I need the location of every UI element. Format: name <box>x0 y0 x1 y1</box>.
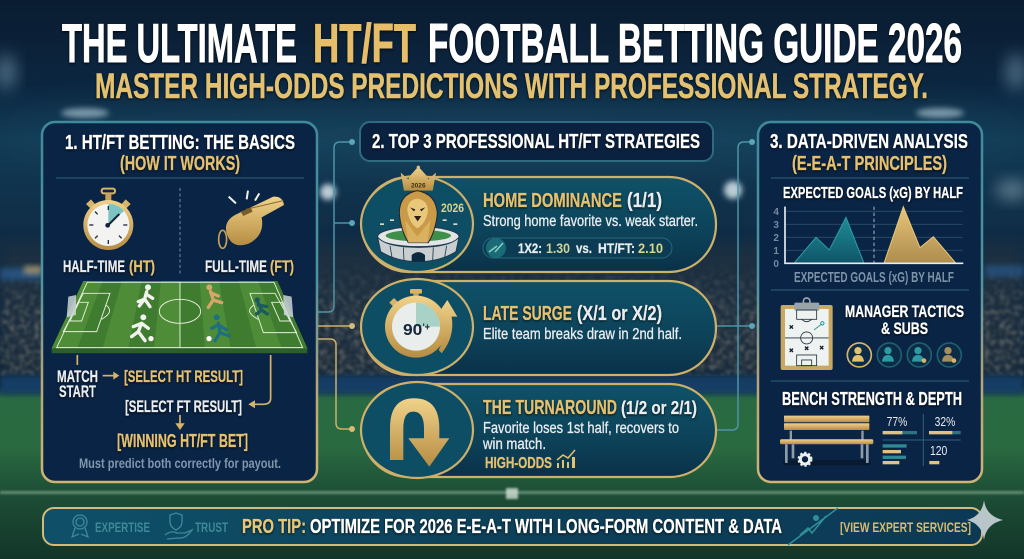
high-odds tag with chart icon: HIGH-ODDS <box>485 455 552 472</box>
title: HT/FT <box>313 12 416 74</box>
icon: whistle <box>219 191 284 248</box>
area chart: xG by half: 3 <box>773 220 779 231</box>
strategy description: Elite team breaks draw in 2nd half. <box>483 326 682 343</box>
panel 1 heading: (HOW IT WORKS) <box>120 153 240 175</box>
connectors: strategies to panel 3 <box>716 139 755 430</box>
chart accent <box>788 508 838 545</box>
icon: tactics clipboard <box>781 298 833 370</box>
strategy title: (1/1) <box>627 190 662 212</box>
label: manager tactics: MANAGER TACTICS <box>845 302 964 321</box>
players <box>132 284 267 341</box>
icon: U-turn arrow <box>361 382 473 478</box>
icon: expertise ribbon <box>72 515 88 537</box>
flow: select HT: [SELECT HT RESULT] <box>124 367 243 386</box>
label: 2026: 2026 <box>441 201 464 215</box>
area chart: xG by half <box>773 207 963 270</box>
area chart: xG by half: 4 <box>773 207 779 218</box>
flow: select FT: [SELECT FT RESULT] <box>125 397 242 416</box>
label: expertise: EXPERTISE <box>95 519 150 535</box>
icon: trust hand and shield <box>165 513 192 539</box>
card: the turnaround <box>361 382 716 478</box>
icon: 90+ stopwatch <box>361 279 473 375</box>
strategy title: (1/2 or 2/1) <box>621 398 697 418</box>
link: view expert services: [VIEW EXPERT SERVICES] <box>840 519 971 535</box>
football pitch with players <box>52 281 307 353</box>
icon: stopwatch <box>83 189 133 250</box>
odds pill: vs. <box>576 240 592 256</box>
icon: lion and stadium <box>361 166 473 272</box>
footnote: Must predict both correctly for payout. <box>79 455 281 471</box>
label: half-time: (HT) <box>129 257 155 276</box>
panel 1 heading <box>65 132 295 175</box>
area chart: xG by half: 1 <box>773 246 779 257</box>
panel 1: HT/FT basics <box>42 122 317 482</box>
strategy description: Favorite loses 1st half, recovers to <box>483 420 679 437</box>
flow: match start: START <box>59 382 96 401</box>
label: trust: TRUST <box>195 519 228 535</box>
strategy description: win match. <box>482 436 546 453</box>
strategy title: (X/1 or X/2) <box>577 303 662 325</box>
bench stats: 120 <box>930 444 947 458</box>
panel 2 heading <box>360 122 713 161</box>
flow arrows <box>77 355 271 430</box>
area chart: xG by half: 0 <box>773 259 779 270</box>
icon: lion and stadium: 2026 <box>411 183 426 189</box>
strategy description: Strong home favorite vs. weak starter. <box>483 213 698 230</box>
card: home dominance <box>361 166 716 272</box>
label: full-time: (FT) <box>270 257 294 276</box>
pro tip text: PRO TIP: <box>242 516 306 538</box>
label: full-time: FULL-TIME <box>205 257 267 276</box>
label: manager tactics: & SUBS <box>881 319 928 338</box>
icon: bench <box>780 416 873 466</box>
label: half-time: HALF-TIME <box>63 257 125 276</box>
strategy title: LATE SURGE <box>483 303 572 325</box>
strategy title: HOME DOMINANCE <box>483 190 622 212</box>
icons: manager and substitutes <box>847 343 961 367</box>
flow: match start <box>57 367 98 401</box>
bench stats: 32% <box>935 415 955 429</box>
panel 3 heading <box>770 131 968 175</box>
title: THE ULTIMATE <box>62 12 297 74</box>
pro tip bar <box>43 508 982 545</box>
pro tip text: OPTIMIZE FOR 2026 E-E-A-T WITH LONG-FORM CONTENT & DATA <box>310 516 782 538</box>
panel 2 heading: 2. TOP 3 PROFESSIONAL HT/FT STRATEGIES <box>372 131 700 153</box>
icon: sparkle <box>967 500 1003 540</box>
strategy title: THE TURNAROUND <box>483 397 617 419</box>
panel 1 heading: 1. HT/FT BETTING: THE BASICS <box>65 132 295 154</box>
icon: 90+ stopwatch: '+ <box>423 323 430 334</box>
odds pill: 2.10 <box>638 240 663 256</box>
panel 3 heading: (E-E-A-T PRINCIPLES) <box>792 153 947 175</box>
pro tip text <box>242 516 782 538</box>
odds pill <box>483 238 672 258</box>
connectors: panel 1 to strategies <box>317 139 355 432</box>
icon: 90+ stopwatch: 90 <box>403 322 422 339</box>
flow: match start: MATCH <box>57 367 98 386</box>
bench stats: 77% <box>887 415 907 429</box>
panel 3: data-driven analysis <box>758 122 982 482</box>
flow: winning bet: [WINNING HT/FT BET] <box>117 431 248 451</box>
card: late surge <box>361 279 716 375</box>
area chart: xG by half: 2 <box>773 233 779 244</box>
odds pill: 1X2: <box>518 240 542 256</box>
strategy description <box>482 420 679 453</box>
odds pill: HT/FT: <box>598 240 635 256</box>
label: manager tactics <box>845 302 964 338</box>
bench stats <box>883 414 961 466</box>
odds pill: 1.30 <box>546 240 570 256</box>
title <box>62 12 962 74</box>
panel 3 heading: 3. DATA-DRIVEN ANALYSIS <box>770 131 968 153</box>
